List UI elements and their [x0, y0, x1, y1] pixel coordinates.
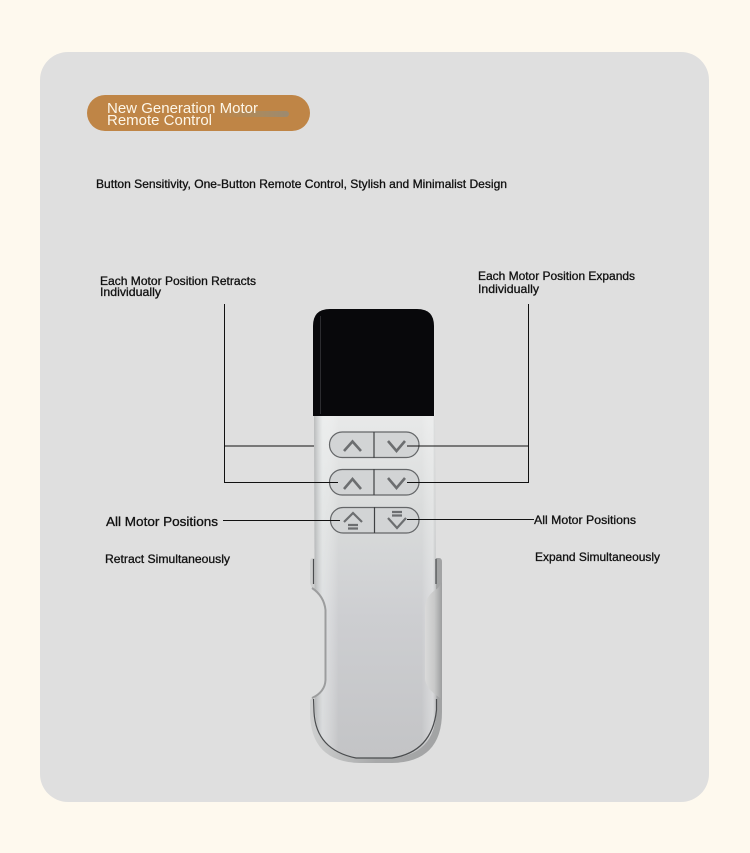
leader lines: right expand individually [407, 304, 528, 482]
remote clip dark edges [314, 559, 436, 758]
icon: up chevron [344, 479, 361, 489]
remote body edge shading [314, 416, 436, 758]
remote clip right arm [425, 582, 442, 700]
leader line: all retract [223, 520, 340, 522]
left arm edge [312, 588, 326, 698]
heading badge [87, 95, 310, 131]
label: all motor positions expand: Expand Simultaneously [535, 550, 660, 564]
icon: up chevron with bar [344, 513, 362, 528]
button row 1 [330, 432, 419, 458]
label: each motor position retracts: Individually [100, 285, 161, 299]
button row 3 [330, 507, 419, 533]
leader lines: left retract individually [224, 304, 338, 482]
remote screen [313, 309, 434, 416]
remote control [310, 309, 442, 763]
label: each motor position retracts: Each Motor Position Retracts [100, 274, 256, 288]
label: each motor position expands [478, 269, 635, 296]
screen highlight [320, 316, 321, 414]
button row 2 [330, 469, 419, 495]
subtitle: Button Sensitivity, One-Button Remote Control, Stylish and Minimalist Design [96, 177, 507, 191]
label: all motor positions expand [534, 513, 660, 564]
label: each motor position expands: Each Motor Position Expands [478, 269, 635, 283]
icon: down chevron [388, 441, 405, 451]
heading text line 1: New Generation Motor [107, 101, 258, 117]
label: all motor positions expand: All Motor Positions [534, 513, 636, 527]
heading text line 2: Remote Control [107, 113, 212, 129]
panel: grey background card [40, 52, 709, 802]
remote clip left arm [310, 583, 326, 700]
icon: up chevron [344, 442, 361, 451]
label: each motor position retracts [100, 274, 256, 299]
leader line: all expand [407, 518, 534, 520]
label: all motor positions retract: Retract Simultaneously [105, 552, 230, 566]
icon: down chevron with bar [388, 512, 406, 528]
label: each motor position expands: Individually [478, 282, 539, 296]
icon: down chevron [388, 478, 405, 488]
label: all motor positions retract: All Motor Positions [106, 514, 219, 529]
remote belt clip [310, 558, 442, 763]
remote body [314, 410, 436, 758]
label: all motor positions retract [105, 514, 230, 566]
